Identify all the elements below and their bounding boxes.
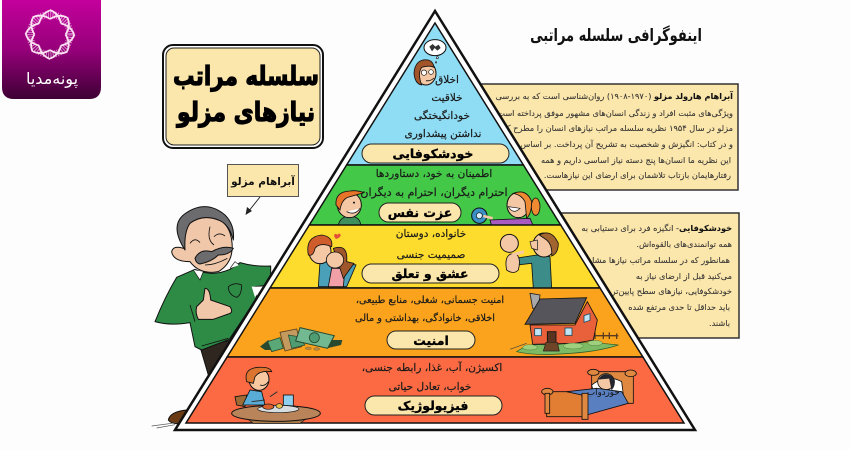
list: self-actualization needs (405, 74, 481, 140)
list: self-actualization needs: خودانگیختگی (414, 109, 470, 122)
logo: پونه مدیا (2, 0, 101, 99)
arrow: label to Maslow (246, 197, 260, 215)
title line 2: نیازهای مزلو (176, 97, 315, 128)
moustache and face (195, 247, 233, 264)
pill: physiological (365, 396, 502, 415)
list: esteem needs: اطمینان به خود، دستاوردها (376, 168, 492, 180)
list: self-actualization needs: خلاقیت (431, 92, 463, 104)
hand (196, 288, 232, 319)
list: safety needs (355, 295, 504, 324)
list: safety needs: اخلاقی، خانوادگی، بهداشتی و مالی (355, 312, 495, 324)
biography text: و در کتاب: انگیزش و شخصیت به تشریح آن پرداخت. بر اساس (520, 139, 733, 149)
logo wordmark: پونه‌مدیا (26, 69, 78, 89)
pill: self-actualization: خودشکوفایی (393, 146, 473, 161)
title box (163, 45, 323, 148)
icon: person sleeping in bed: خوردواب (587, 388, 620, 398)
list: love needs: صمیمیت جنسی (397, 249, 465, 261)
icon: girl with gift (472, 192, 540, 226)
pill: safety: امنیت (413, 333, 449, 348)
list: physiological needs: خواب، تعادل حیاتی (389, 381, 471, 393)
note text: باشند. (709, 318, 730, 328)
biography text: آبراهام هارولد مزلو (۱۹۷۰-۱۹۰۸) روان‌شناسی است که به بررسی (496, 91, 733, 102)
level: esteem (309, 165, 561, 226)
shoe (168, 410, 187, 424)
note text: خودشکوفایی، نیازهای سطح پایین‌تر (611, 286, 732, 296)
pyramid (175, 11, 695, 430)
pill: safety (387, 331, 475, 349)
note text: باید حداقل تا حدی مرتفع شده (628, 302, 730, 312)
level: love and belonging (270, 225, 600, 288)
biography text: این نظریه ما انسان‌ها پنج دسته نیاز اساسی داریم و همه (541, 155, 731, 165)
icon: thinking child (414, 40, 446, 85)
note text: همه توانمندی‌های بالقوه‌اش. (636, 239, 732, 249)
panel: self-actualization note (550, 213, 739, 338)
pyramid frame (175, 11, 695, 430)
note text: می‌کنید قبل از ارضای نیاز به (636, 271, 732, 281)
illustration: Abraham Maslow (152, 207, 271, 428)
panel: Maslow biography (480, 84, 738, 190)
list: love needs: خانواده، دوستان (396, 228, 466, 240)
biography text: ویژگی‌های مثبت افراد و زندگی انسان‌های مشهور موفق پرداخته است (497, 108, 733, 118)
pill: self-actualization (362, 144, 509, 163)
list: safety needs: امنیت جسمانی، شغلی، منابع طبیعی، (356, 295, 504, 306)
pill: love and belonging: عشق و تعلق (391, 266, 469, 281)
sweater (155, 263, 271, 350)
list: esteem needs (360, 168, 508, 199)
level: safety (227, 288, 643, 357)
list: self-actualization needs: نداشتن پیشداوری (405, 128, 481, 140)
title line 1: سلسله مراتب (173, 61, 319, 92)
biography text: مزلو در سال ۱۹۵۴ نظریه سلسله مراتب نیازهای انسان را مطرح کرد (499, 123, 733, 133)
icon: house (510, 293, 618, 354)
list: physiological needs (362, 361, 502, 393)
icon: money and coins (260, 328, 342, 352)
pill: love and belonging (362, 264, 499, 283)
pill: esteem (379, 203, 461, 222)
icon: logo ring (21, 5, 79, 64)
hair (177, 207, 234, 250)
head (172, 215, 232, 272)
icon: parent with baby (500, 233, 558, 288)
icon: boy (336, 191, 364, 225)
list: love needs (396, 228, 466, 261)
list: physiological needs: اکسیژن، آب، غذا، رابطه جنسی، (362, 361, 502, 374)
note text: خودشکوفایی- انگیزه فرد برای دستیابی به (581, 223, 732, 234)
biography text (496, 91, 733, 180)
icon: person sleeping in bed (542, 369, 636, 419)
level: self-actualization (347, 23, 523, 165)
level: physiological (186, 357, 684, 423)
list: esteem needs: احترام دیگران، احترام به دیگران (360, 186, 508, 199)
pill: esteem: عزت نفس (388, 205, 452, 220)
icon: hugging couple (308, 234, 356, 287)
pill: physiological: فیزیولوژیک (398, 398, 468, 413)
trousers (200, 340, 232, 375)
heading: اینفوگرافی سلسله مراتبی (530, 25, 702, 46)
note text (579, 223, 732, 328)
list: self-actualization needs: اخلاق (435, 74, 459, 86)
note text: همانطور که در سلسله مراتب نیازها مشاهده (579, 255, 730, 265)
biography text: رفتارهایمان بازتاب تلاشمان برای ارضای این نیازهاست. (544, 170, 731, 180)
label: Abraham Maslow: آبراهام مزلو (230, 175, 295, 188)
icon: boy eating (232, 367, 320, 423)
label: Abraham Maslow (228, 164, 298, 196)
